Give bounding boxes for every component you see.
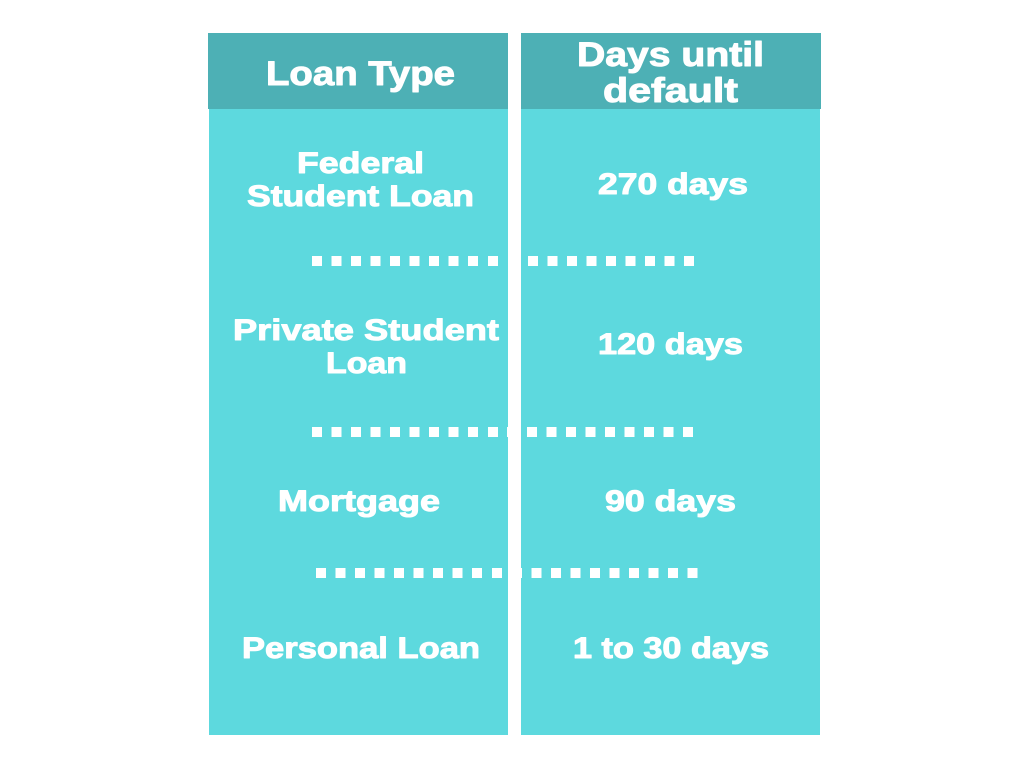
panel: days until default column <box>521 33 821 735</box>
row 2 loan type: private student loan: Private Student <box>233 314 499 347</box>
row 1 days: 270 days: 270 days <box>598 168 748 201</box>
panel: loan type column <box>208 33 508 735</box>
row 1 loan type: federal student loan: Student Loan <box>247 180 474 213</box>
header: loan type <box>208 33 508 109</box>
dotted divider 3 <box>316 568 698 578</box>
row 2 loan type: private student loan: Loan <box>326 347 407 380</box>
header: days until default: default <box>603 72 738 110</box>
row 3 days: 90 days: 90 days <box>605 485 736 518</box>
row 3 loan type: mortgage: Mortgage <box>278 485 440 518</box>
row 2 days: 120 days: 120 days <box>598 328 743 361</box>
row 1 loan type: federal student loan <box>247 147 474 213</box>
dotted divider 2 <box>312 427 693 437</box>
dotted divider 1 <box>312 256 694 266</box>
header: days until default: Days until <box>577 36 764 74</box>
header: loan type: Loan Type <box>266 55 455 93</box>
row 1 loan type: federal student loan: Federal <box>297 147 424 180</box>
row 4 days: 1 to 30 days: 1 to 30 days <box>573 632 769 665</box>
row 2 loan type: private student loan <box>233 314 499 380</box>
row 4 loan type: personal loan: Personal Loan <box>242 632 480 665</box>
header: days until default <box>521 33 821 110</box>
